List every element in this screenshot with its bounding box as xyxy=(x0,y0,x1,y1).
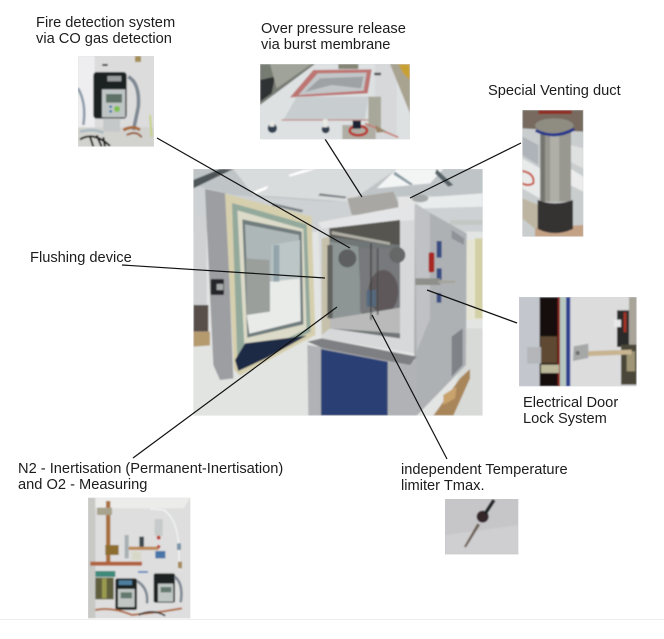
exhaust box on top xyxy=(347,192,398,215)
label: flushing device: Flushing device xyxy=(30,250,132,266)
label: N2 inertisation and O2 measuring: and O2 - Measuring xyxy=(18,477,147,493)
pallet xyxy=(433,369,470,416)
door lock and extinguisher xyxy=(437,241,442,258)
label: special venting duct: Special Venting duct xyxy=(488,83,621,99)
photo: climate test chamber with open door xyxy=(190,165,490,422)
callout line: N2 inertisation xyxy=(133,307,337,458)
label: fire detection system: Fire detection system xyxy=(36,15,175,31)
door frame xyxy=(225,194,315,376)
label: N2 inertisation and O2 measuring xyxy=(18,461,283,493)
label: independent temperature limiter xyxy=(401,462,568,494)
label: electrical door lock system xyxy=(523,395,618,427)
chamber interior xyxy=(329,220,400,338)
photo: burst membrane xyxy=(260,64,410,140)
callout line: venting duct xyxy=(410,143,521,198)
photo: CO gas detector xyxy=(78,56,154,147)
photo: N2 and O2 control cabinet xyxy=(88,498,190,618)
label: independent temperature limiter: independent Temperature xyxy=(401,462,568,478)
callout line: temperature limiter xyxy=(372,315,447,459)
label: electrical door lock system: Electrical Door xyxy=(523,395,618,411)
photo: temperature probe xyxy=(445,499,518,554)
label: fire detection system xyxy=(36,15,175,47)
callout line: over pressure release xyxy=(325,139,362,197)
far wall and floor xyxy=(194,232,207,306)
chamber body xyxy=(319,221,414,352)
label: over pressure release xyxy=(261,21,406,53)
photo: venting duct xyxy=(522,110,584,237)
photo: electrical door lock xyxy=(519,297,637,386)
label: over pressure release: via burst membrane xyxy=(261,37,390,53)
callout line: fire detection xyxy=(157,138,350,248)
label: independent temperature limiter: limiter Tmax. xyxy=(401,478,485,494)
blue lower panel xyxy=(321,349,388,416)
ceiling xyxy=(190,165,490,232)
label: N2 inertisation and O2 measuring: N2 - Inertisation (Permanent-Inertisation) xyxy=(18,461,283,477)
label: electrical door lock system: Lock System xyxy=(523,411,607,427)
label: fire detection system: via CO gas detection xyxy=(36,31,172,47)
label: over pressure release: Over pressure release xyxy=(261,21,406,37)
door hinge panel xyxy=(205,189,233,380)
faint page edge rule xyxy=(0,619,664,620)
callout line: flushing device xyxy=(122,265,325,278)
callout line: door lock xyxy=(427,290,517,323)
